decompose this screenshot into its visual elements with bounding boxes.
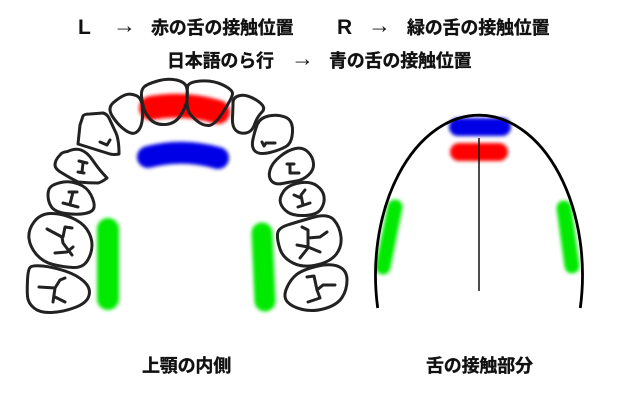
tooth: right canine: [252, 115, 293, 154]
tooth: left second premolar: [48, 182, 94, 214]
key letter L: L: [78, 16, 91, 39]
tooth: right first premolar: [269, 148, 314, 184]
contact zone: green (R) left side of tongue: [383, 207, 395, 267]
contact zone: green (R) right side: [262, 233, 265, 301]
contact zone: red (L) on tongue tip: [459, 143, 499, 161]
tooth: left first molar: [29, 213, 92, 268]
diagram: inside of the upper jaw: [27, 79, 347, 313]
tooth: left second molar: [27, 266, 89, 313]
caption: inside of upper jaw: 上顎の内側: [142, 356, 231, 376]
arrow from ra-row: →: [291, 45, 314, 71]
contact zone: green (R) left side: [97, 229, 119, 299]
tooth: left lateral incisor: [110, 94, 143, 133]
label: blue tongue contact position: 青の舌の接触位置: [329, 51, 471, 71]
arrow from R: →: [368, 12, 391, 38]
legend: L and R tongue positions and Japanese ra-row: [78, 12, 550, 71]
tooth: right second premolar: [280, 182, 324, 216]
key: Japanese ra-row: 日本語のら行: [167, 51, 274, 71]
caption: tongue contact part: 舌の接触部分: [426, 356, 533, 376]
contact zone: blue (ra-row) on palate: [148, 153, 218, 158]
diagram: tongue contact areas: [375, 115, 582, 308]
tooth: right second molar: [285, 265, 347, 311]
tooth: left canine: [78, 113, 119, 154]
teeth: upper dental arch: [27, 79, 347, 313]
tooth: left central incisor: [141, 79, 187, 125]
contact zone: blue (ra-row) on tongue tip: [458, 118, 502, 136]
contact zone: red (L) on upper teeth: [151, 106, 218, 112]
label: green tongue contact position: 緑の舌の接触位置: [407, 18, 549, 38]
tongue outline: [375, 115, 582, 308]
tooth: left first premolar: [55, 149, 107, 183]
tooth: right first molar: [277, 216, 341, 266]
tongue centre line: [478, 138, 480, 291]
tooth: right central incisor: [187, 81, 233, 126]
key letter R: R: [337, 16, 352, 39]
contact zone: green (R) right side of tongue: [564, 208, 572, 266]
tooth: right lateral incisor: [232, 95, 264, 133]
arrow from L: →: [113, 12, 136, 38]
label: red tongue contact position: 赤の舌の接触位置: [151, 18, 293, 38]
